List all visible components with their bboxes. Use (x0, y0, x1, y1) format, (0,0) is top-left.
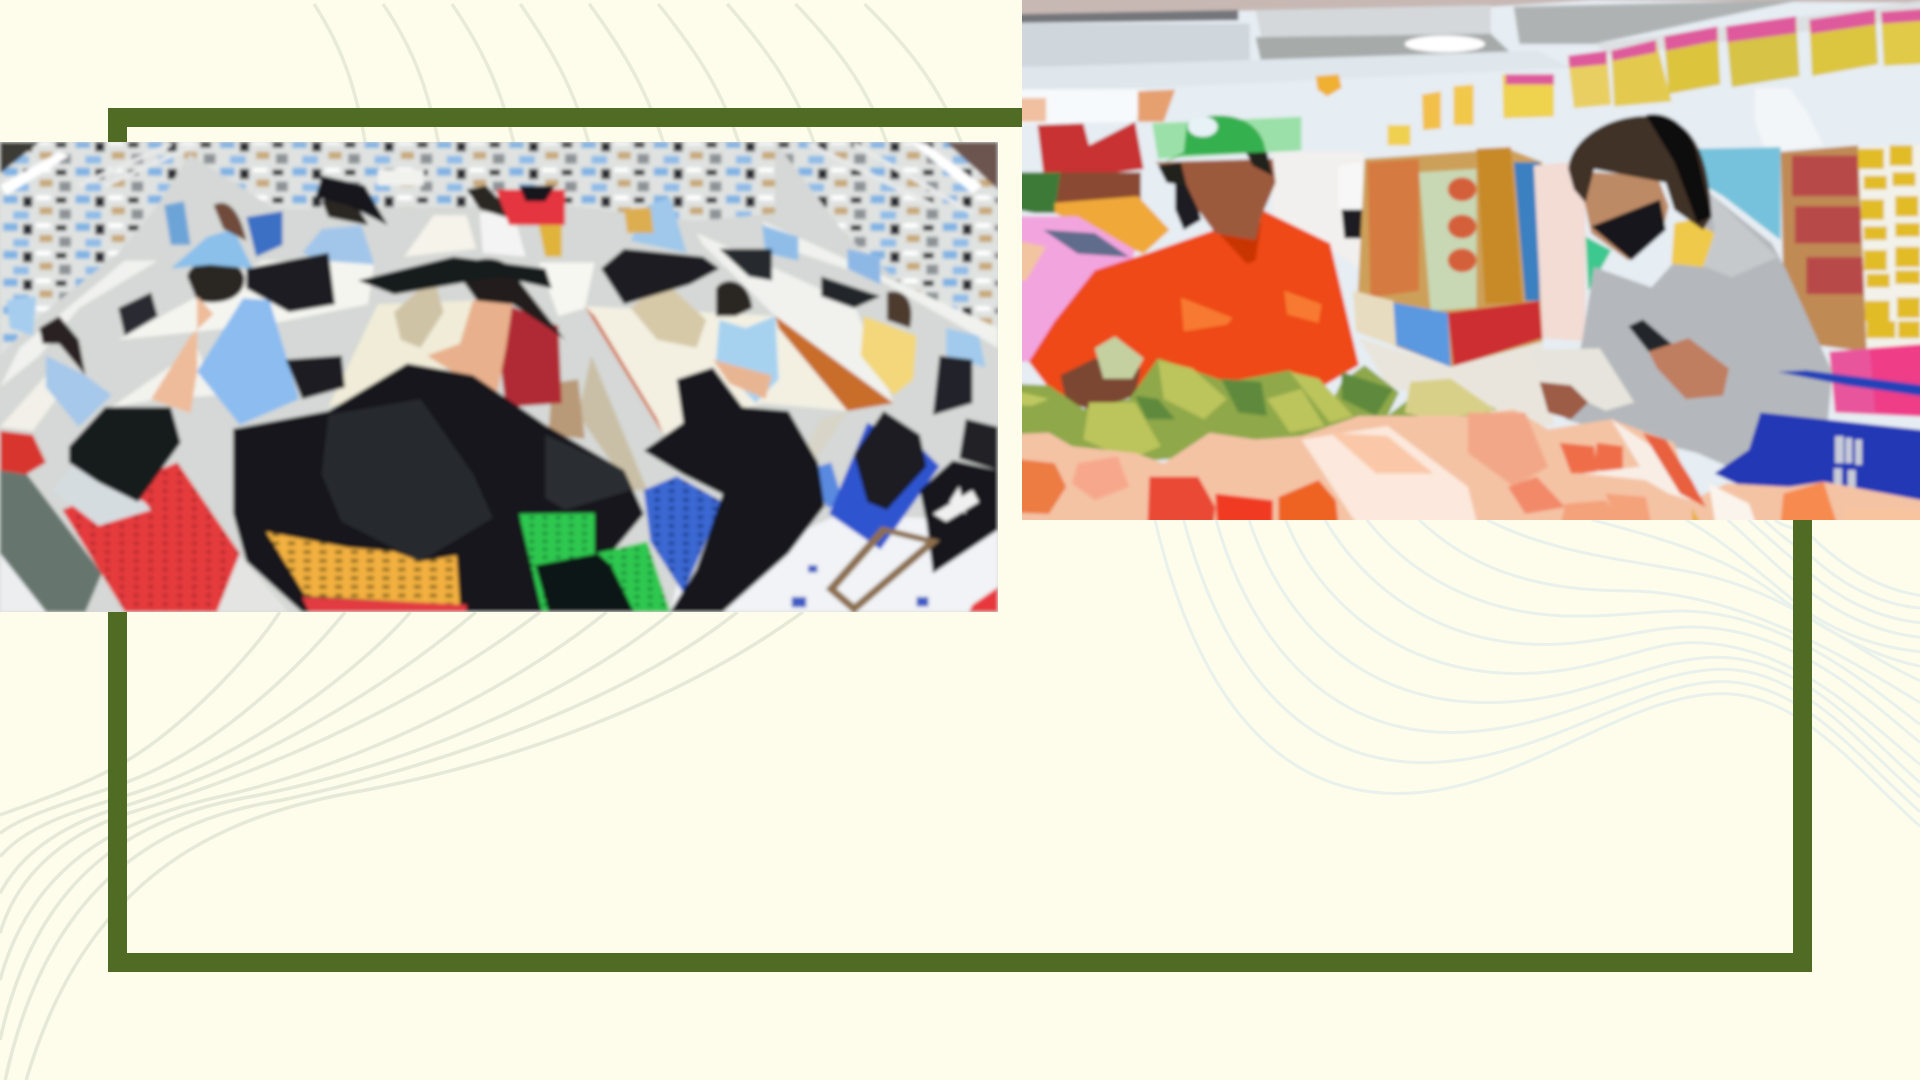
woman (1565, 193, 1832, 473)
tables (404, 215, 476, 257)
stool (831, 530, 933, 609)
ceiling (963, 0, 1920, 15)
cart (1715, 412, 1920, 507)
photo: supermarket shoppers (1022, 0, 1920, 520)
floor gap (1548, 379, 1594, 423)
right shelving (1697, 147, 1781, 240)
dark fabric on tables (246, 253, 335, 312)
vegetables (963, 358, 1497, 460)
photo: garment factory workers (0, 142, 998, 612)
left store (1037, 122, 1144, 176)
red crate (62, 462, 240, 612)
floor (0, 553, 46, 612)
man (1029, 210, 1359, 396)
white column (1534, 161, 1585, 341)
pillar (0, 439, 102, 612)
yellow crate (266, 532, 460, 605)
tomatoes (963, 409, 1920, 554)
right black fabric (644, 368, 825, 612)
green frame (108, 108, 1812, 972)
green crate (519, 513, 670, 612)
workers (197, 298, 299, 425)
black fabric pile (233, 364, 644, 612)
blue crates (644, 476, 723, 593)
signage (1568, 52, 1611, 108)
stacked gift boxes (1356, 149, 1542, 367)
aisle (1273, 152, 1365, 270)
